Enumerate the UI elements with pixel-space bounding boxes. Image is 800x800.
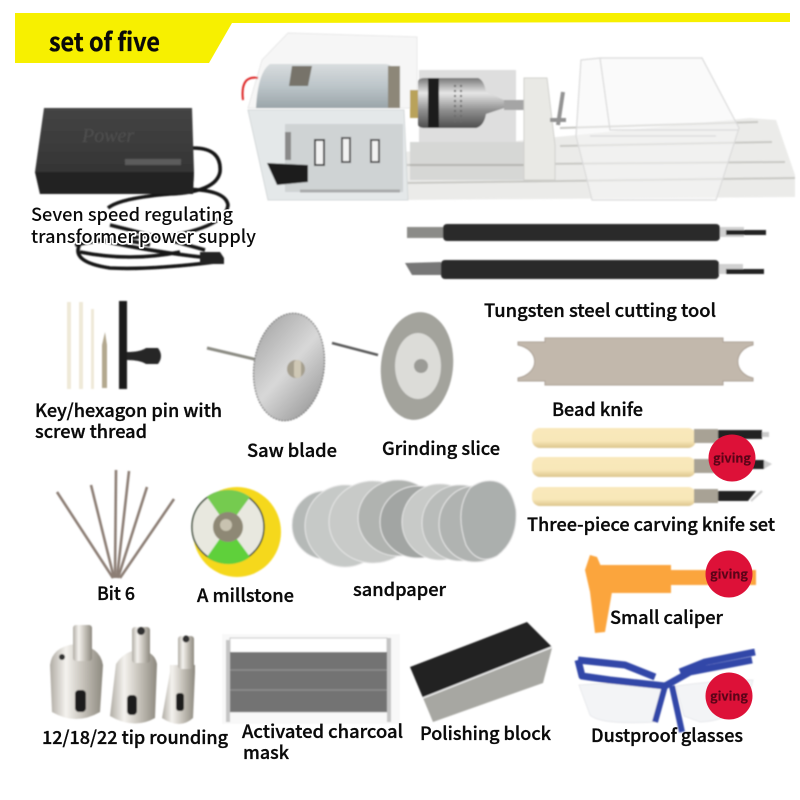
tailstock block — [524, 78, 555, 180]
banner title: set of five — [49, 23, 160, 59]
badge: giving caliper — [706, 550, 752, 598]
small caliper — [585, 555, 756, 633]
label: charcoal mask — [242, 718, 403, 765]
badge: giving carving knife: giving — [713, 448, 751, 466]
badge: giving caliper: giving — [710, 564, 748, 582]
banner — [15, 13, 790, 63]
mini lathe — [243, 33, 795, 200]
tool two — [405, 260, 764, 279]
key and hexagon pins — [67, 301, 161, 389]
label: bead knife: Bead knife — [552, 396, 643, 422]
label: tungsten tool: Tungsten steel cutting tool — [484, 297, 716, 323]
pins — [67, 302, 107, 389]
tool one — [407, 224, 766, 241]
knife three — [532, 487, 762, 506]
label: saw blade: Saw blade — [247, 437, 337, 463]
cable — [75, 148, 228, 268]
power adapter — [35, 108, 228, 268]
millstone — [192, 487, 281, 577]
plug — [200, 252, 224, 264]
bead knife — [518, 338, 753, 385]
badge: giving glasses — [706, 672, 752, 720]
thumb screw — [550, 92, 566, 125]
adapter body: Power — [81, 125, 134, 147]
badge: giving glasses: giving — [710, 686, 748, 704]
chuck key — [119, 301, 161, 389]
hole saw small — [162, 636, 195, 724]
label: tip rounding: 12/18/22 tip rounding — [42, 724, 229, 750]
label: power supply: Seven speed regulating — [31, 201, 234, 227]
label: carving knife: Three-piece carving knife set — [527, 511, 775, 537]
label: key: Key/hexagon pin with — [35, 397, 222, 423]
charcoal mask — [222, 634, 400, 724]
motor guard — [248, 33, 417, 108]
grinding slice — [332, 309, 458, 423]
sandpaper discs — [292, 480, 516, 567]
power switch — [267, 163, 308, 185]
label: dustproof glasses: Dustproof glasses — [591, 722, 743, 748]
polishing block — [410, 622, 552, 722]
dustproof glasses — [578, 652, 755, 732]
label: key — [35, 397, 222, 444]
carving knife set — [532, 428, 772, 506]
tungsten steel cutting tools — [405, 224, 766, 279]
label: charcoal mask: mask — [243, 739, 290, 765]
hole saw large — [50, 625, 103, 719]
hole saw medium — [110, 627, 157, 724]
label: grinding slice: Grinding slice — [382, 435, 500, 461]
saw blade — [207, 309, 331, 425]
tip rounding hole saws — [50, 625, 195, 724]
label: millstone: A millstone — [197, 582, 294, 608]
label: charcoal mask: Activated charcoal — [242, 718, 403, 744]
label: bit: Bit 6 — [97, 580, 135, 606]
rail — [404, 118, 795, 200]
adapter body — [35, 108, 194, 194]
frame — [578, 652, 755, 686]
label: power supply: transformer power supply — [31, 223, 256, 249]
badge: giving carving knife — [708, 434, 756, 482]
lens — [579, 680, 753, 723]
nose piece — [655, 686, 682, 732]
label: key: screw thread — [35, 418, 147, 444]
knife two — [532, 457, 772, 477]
clear shield — [576, 58, 739, 200]
label: polishing block: Polishing block — [420, 720, 552, 746]
motor — [243, 64, 400, 108]
knife one — [532, 428, 769, 448]
backplate — [419, 70, 516, 142]
label: small caliper: Small caliper — [610, 604, 724, 630]
label: sandpaper: sandpaper — [353, 576, 447, 602]
motor mount — [248, 110, 408, 200]
drill bits — [57, 470, 174, 578]
chuck — [410, 78, 526, 128]
label: power supply — [31, 201, 256, 249]
